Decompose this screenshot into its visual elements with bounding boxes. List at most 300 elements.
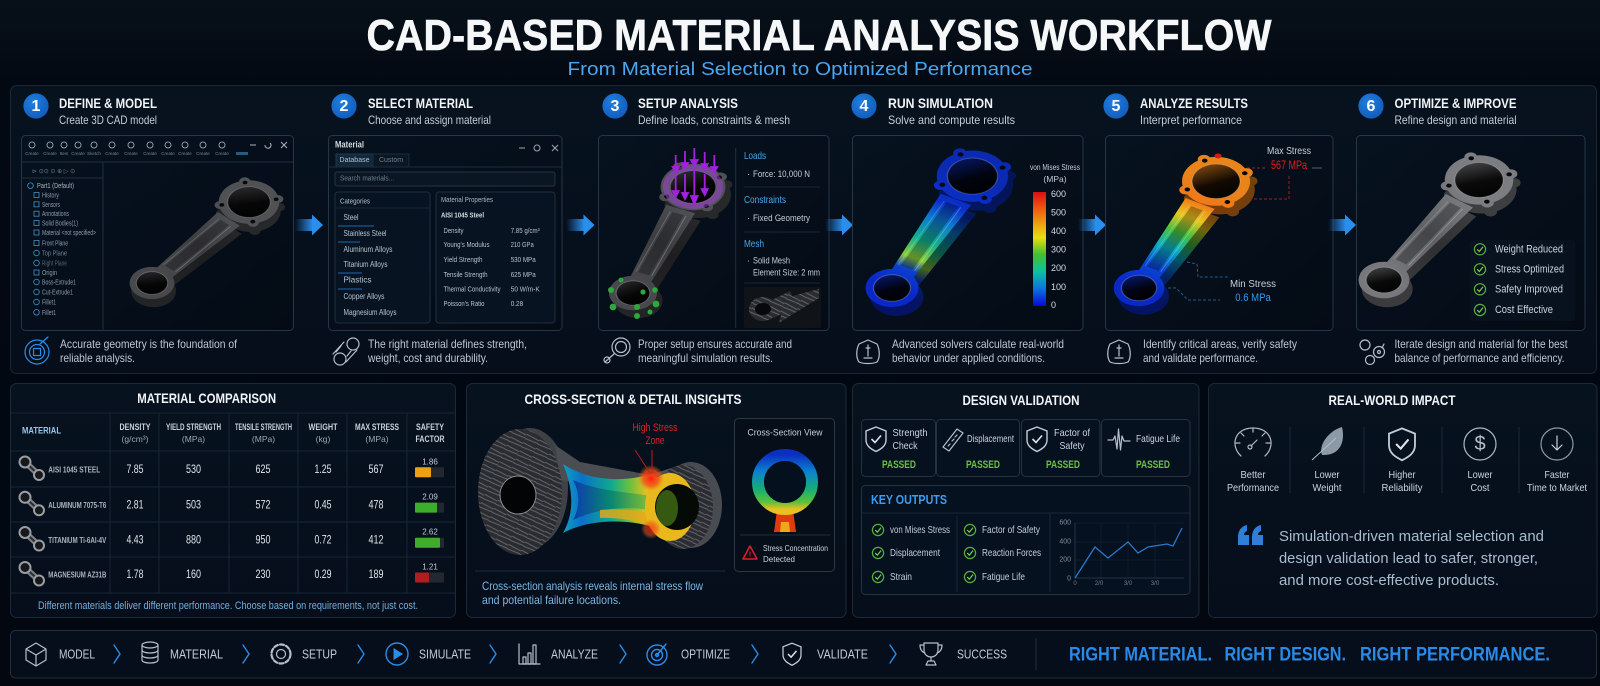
- CAD toolbar: Create: [196, 151, 210, 156]
- footer: setup: SETUP: [302, 646, 337, 662]
- step 1 caption icon: [25, 337, 49, 364]
- step 2 caption icon: [333, 338, 359, 365]
- table header: DENSITY: [120, 422, 150, 432]
- footer: validate: [783, 643, 868, 665]
- min stress callout: 0.6 MPa: [1235, 292, 1272, 304]
- impact: lower weight: Lower: [1314, 469, 1340, 481]
- step 6 number: [1358, 93, 1384, 119]
- categories list: Steel: [344, 213, 359, 222]
- categories list: Categories: [340, 196, 370, 206]
- step 2 material dialog: [328, 136, 562, 330]
- step 5 caption icon: [1108, 340, 1130, 364]
- cross-section caption: Cross-section analysis reveals internal stress flow: [482, 579, 703, 593]
- improvement checklist: Cost Effective: [1495, 304, 1553, 316]
- key outputs checklist: Displacement: [890, 547, 940, 559]
- row: AISI 1045 steel: 1.86: [422, 458, 438, 466]
- key outputs checklist: Fatigue Life: [982, 571, 1025, 583]
- rod with loads and constraints: [548, 148, 790, 324]
- footer: simulate: [386, 643, 471, 665]
- max stress callout: 567 MPa: [1271, 158, 1307, 172]
- material properties: [436, 192, 555, 323]
- impact: lower cost: [1464, 428, 1496, 494]
- step 3 setup panel: [548, 136, 829, 330]
- row: aluminum 7075-T6: 503: [186, 499, 201, 511]
- row: aluminum 7075-T6: 2.09: [422, 492, 438, 502]
- step 6 caption: balance of performance and efficiency.: [1394, 351, 1564, 365]
- cross-section rod cut-away: [478, 428, 722, 555]
- stress colour legend: 300: [1051, 245, 1066, 255]
- high stress zone callout: [632, 422, 678, 473]
- step 6 caption: [1394, 337, 1568, 365]
- step 2 number: [331, 93, 357, 119]
- row: magnesium AZ31B: 230: [256, 569, 270, 581]
- line chart: 200: [1059, 556, 1071, 564]
- step 3 number: 3: [611, 98, 620, 115]
- high stress zone callout: Zone: [646, 435, 664, 447]
- CAD feature tree: Cut-Extrude1: [42, 290, 73, 296]
- footer: analyze: [519, 644, 598, 664]
- stress-coloured rod: [810, 138, 1067, 322]
- stress colour legend: 0: [1051, 300, 1056, 310]
- footer: model: MODEL: [59, 646, 95, 662]
- dialog tabs: Database: [340, 157, 370, 164]
- slogan: RIGHT MATERIAL.: [1069, 644, 1212, 666]
- step 6 subheading: Refine design and material: [1394, 113, 1516, 127]
- CAD toolbar: Sketch: [87, 151, 101, 156]
- table title: MATERIAL COMPARISON: [137, 390, 276, 406]
- optimized rod: [1322, 145, 1555, 311]
- loads, constraints and mesh text: Fixed Geometry: [753, 213, 810, 224]
- CAD toolbar: [25, 142, 287, 175]
- step 1 CAD window: [21, 136, 302, 330]
- search box: [335, 172, 555, 186]
- step 5 caption: and validate performance.: [1143, 351, 1258, 365]
- slogan: RIGHT PERFORMANCE.: [1360, 644, 1550, 666]
- material properties: AISI 1045 Steel: [441, 210, 484, 220]
- step 6 optimized panel: [1322, 136, 1585, 330]
- loads, constraints and mesh text: ·: [747, 213, 750, 224]
- quote text: design validation lead to safer, stronger,: [1279, 550, 1538, 567]
- CAD toolbar: Create: [178, 151, 192, 156]
- arrow 5 to 6: [1328, 214, 1356, 236]
- step 2 caption: The right material defines strength,: [368, 337, 527, 351]
- stress colour legend: 600: [1051, 189, 1066, 199]
- row: titanium Ti-6Al-4V: 950: [256, 534, 270, 546]
- validation card: factor of safety: Factor of: [1054, 427, 1090, 439]
- CAD toolbar: Item: [60, 151, 69, 156]
- row: titanium Ti-6Al-4V: 412: [368, 534, 384, 546]
- categories list: [335, 192, 430, 323]
- material properties: 210 GPa: [511, 240, 534, 249]
- row: titanium Ti-6Al-4V: TITANIUM Ti-6Al-4V: [48, 536, 107, 545]
- CAD feature tree: Right Plane: [42, 260, 67, 268]
- validation card: factor of safety: [1022, 420, 1100, 476]
- min stress callout: Min Stress: [1230, 278, 1276, 290]
- CAD feature tree: [28, 183, 96, 317]
- validation card: strength check: PASSED: [882, 459, 916, 471]
- CAD feature tree: Top Plane: [42, 250, 67, 258]
- material properties: Thermal Conductivity: [444, 284, 501, 294]
- chevron: [243, 645, 249, 663]
- comparison table: [10, 413, 455, 593]
- material properties: 0.28: [511, 299, 523, 308]
- panel: workflow steps: [10, 86, 1596, 374]
- line chart: 0: [1073, 581, 1077, 587]
- stress colour legend: 200: [1051, 263, 1066, 273]
- row: aluminum 7075-T6: [20, 492, 444, 515]
- search box: Search materials...: [340, 176, 394, 182]
- key outputs box: [862, 486, 1190, 594]
- row: aluminum 7075-T6: 0.45: [314, 499, 332, 511]
- loads, constraints and mesh text: Force: 10,000 N: [753, 169, 810, 180]
- row: aluminum 7075-T6: 478: [368, 499, 384, 511]
- row: AISI 1045 steel: 1.25: [314, 464, 332, 476]
- slogan: RIGHT DESIGN.: [1224, 644, 1346, 666]
- design validation title: DESIGN VALIDATION: [962, 392, 1080, 408]
- quote text: and more cost-effective products.: [1279, 572, 1499, 589]
- step 3 heading: SETUP ANALYSIS: [638, 95, 738, 111]
- dialog tabs: Custom: [379, 157, 403, 164]
- table header: YIELD STRENGTH: [166, 422, 221, 432]
- footer: success: SUCCESS: [957, 646, 1007, 662]
- CAD feature tree: Sensors: [42, 202, 60, 209]
- footer: optimize: OPTIMIZE: [681, 646, 730, 662]
- step 5 caption: Identify critical areas, verify safety: [1143, 337, 1297, 351]
- key outputs checklist: von Mises Stress: [890, 524, 950, 536]
- impact: better performance: Performance: [1227, 482, 1279, 494]
- loads, constraints and mesh text: ·: [747, 169, 750, 180]
- cross-section title: CROSS-SECTION & DETAIL INSIGHTS: [524, 391, 742, 407]
- footer: validate: VALIDATE: [817, 646, 868, 662]
- step 5 number: 5: [1112, 98, 1121, 115]
- key outputs checklist: [872, 524, 1041, 583]
- validation card: strength check: Check: [892, 440, 918, 452]
- arrow 4 to 5: [1078, 214, 1106, 236]
- step 4 number: 4: [860, 98, 869, 115]
- row: magnesium AZ31B: 160: [186, 569, 201, 581]
- step 2 material dialog: Material: [335, 140, 364, 150]
- min stress callout: [1168, 262, 1276, 304]
- CAD feature tree: Origin: [42, 270, 57, 277]
- key outputs checklist: Strain: [890, 571, 912, 583]
- validation card: factor of safety: Safety: [1060, 440, 1085, 452]
- material properties: 50 W/m-K: [511, 284, 540, 294]
- step 4 subheading: Solve and compute results: [888, 113, 1015, 127]
- validation card: fatigue life: [1102, 420, 1190, 476]
- step 4: run simulation: [810, 93, 1083, 365]
- row: AISI 1045 steel: [20, 456, 444, 480]
- line chart: 0: [1067, 576, 1071, 582]
- row: AISI 1045 steel: 530: [186, 464, 201, 476]
- table header: TENSILE STRENGTH: [235, 422, 292, 432]
- CAD feature tree: Annotations: [42, 211, 69, 218]
- impact: faster time to market: Faster: [1544, 469, 1570, 481]
- footer: success: [920, 643, 1007, 665]
- loads, constraints and mesh text: Mesh: [744, 238, 764, 250]
- categories list: Plastics: [344, 276, 372, 284]
- step 1: define and model: [21, 93, 302, 365]
- impact title: REAL-WORLD IMPACT: [1328, 392, 1456, 408]
- step 2 caption: weight, cost and durability.: [367, 351, 488, 365]
- loads, constraints and mesh text: ·: [747, 256, 750, 266]
- row: titanium Ti-6Al-4V: 0.72: [314, 534, 332, 546]
- row: AISI 1045 steel: 567: [368, 464, 384, 476]
- impact: lower cost: Cost: [1470, 482, 1490, 494]
- connecting rod model: [111, 174, 302, 309]
- step 5 number: [1103, 93, 1129, 119]
- loads, constraints and mesh text: Constraints: [744, 194, 786, 206]
- step 5 heading: ANALYZE RESULTS: [1140, 95, 1248, 111]
- panel: real-world impact: [1208, 384, 1597, 618]
- footer: analyze: ANALYZE: [551, 646, 598, 662]
- step 5 results panel: [1061, 136, 1333, 330]
- CAD toolbar: Create: [105, 151, 119, 156]
- impact: lower cost: $: [1474, 433, 1486, 455]
- row: magnesium AZ31B: 189: [368, 569, 384, 581]
- line chart: 3/0: [1124, 581, 1133, 587]
- dialog tabs: [328, 154, 562, 167]
- row: AISI 1045 steel: 625: [256, 464, 270, 476]
- CAD toolbar: ⊳ ⊙⊙ ⊙ ⊕ ▷ ⊙: [32, 169, 75, 175]
- slogan: [1069, 644, 1550, 666]
- CAD toolbar: Create: [215, 151, 229, 156]
- categories list: Magnesium Alloys: [344, 308, 396, 317]
- step 2 subheading: Choose and assign material: [368, 113, 491, 127]
- step 6 number: 6: [1367, 98, 1376, 115]
- title: CAD-BASED MATERIAL ANALYSIS WORKFLOW: [366, 11, 1272, 60]
- categories list: Copper Alloys: [344, 292, 384, 301]
- loads, constraints and mesh text: [744, 150, 820, 283]
- improvement checklist: Stress Optimized: [1495, 263, 1564, 275]
- material properties: 625 MPa: [511, 270, 536, 279]
- improvement checklist: [1470, 240, 1575, 321]
- step 2 heading: SELECT MATERIAL: [368, 95, 473, 111]
- stress colour legend: 500: [1051, 208, 1066, 218]
- footer: setup: [272, 644, 337, 664]
- cross-section view inset: Cross-Section View: [748, 428, 823, 438]
- CAD toolbar: Create: [143, 151, 157, 156]
- step 1 subheading: Create 3D CAD model: [59, 113, 157, 127]
- stress warning: !: [749, 550, 751, 558]
- step 3 caption: Proper setup ensures accurate and: [638, 337, 792, 351]
- improvement checklist: Safety Improved: [1495, 283, 1563, 295]
- row: titanium Ti-6Al-4V: 880: [186, 534, 201, 546]
- material properties: Yield Strength: [444, 255, 482, 264]
- step 6 caption icon: [1360, 340, 1384, 364]
- step 1 caption: [60, 337, 238, 365]
- material properties: Tensile Strength: [444, 270, 488, 279]
- mesh thumbnail: [744, 287, 821, 328]
- CAD feature tree: Fillet1: [42, 310, 56, 317]
- arrow 1 to 2: [295, 214, 323, 236]
- panel: design validation: [852, 384, 1199, 618]
- chevron: [114, 645, 120, 663]
- table header: FACTOR: [416, 434, 445, 444]
- line chart: 600: [1059, 520, 1071, 526]
- impact: lower weight: Weight: [1312, 482, 1342, 494]
- key outputs box: KEY OUTPUTS: [871, 492, 947, 507]
- impact: higher reliability: [1382, 428, 1423, 494]
- impact: faster time to market: Time to Market: [1527, 482, 1587, 494]
- loads, constraints and mesh text: Element Size: 2 mm: [753, 268, 820, 278]
- row: magnesium AZ31B: 0.29: [314, 569, 332, 581]
- row: magnesium AZ31B: MAGNESIUM AZ31B: [48, 570, 106, 580]
- CAD feature tree: Fillet1: [42, 300, 56, 306]
- step 3 caption: [638, 337, 792, 365]
- row: magnesium AZ31B: [20, 562, 444, 586]
- step 4 heading: RUN SIMULATION: [888, 95, 993, 111]
- step 2 number: 2: [340, 98, 349, 115]
- key outputs checklist: Reaction Forces: [982, 547, 1041, 559]
- impact: better performance: [1227, 428, 1279, 494]
- validation card: displacement: [936, 420, 1020, 476]
- row: aluminum 7075-T6: ALUMINUM 7075-T6: [48, 501, 107, 510]
- material properties: Material Properties: [441, 197, 493, 204]
- validation card: displacement: PASSED: [966, 459, 1000, 471]
- stress colour legend: 100: [1051, 282, 1066, 292]
- validation card: factor of safety: PASSED: [1046, 459, 1080, 471]
- categories list: Stainless Steel: [344, 229, 387, 238]
- stress warning: Detected: [763, 554, 795, 564]
- improvement checklist: Weight Reduced: [1495, 243, 1563, 255]
- footer: simulate: SIMULATE: [419, 646, 471, 662]
- cross-section caption: and potential failure locations.: [482, 593, 621, 607]
- material properties: 7.85 g/cm³: [511, 226, 540, 235]
- impact: lower weight: [1312, 427, 1343, 494]
- CAD toolbar: Create: [124, 151, 138, 156]
- CAD toolbar: Create: [25, 151, 39, 156]
- categories list: Titanium Alloys: [344, 260, 388, 269]
- step 4 caption: Advanced solvers calculate real-world: [892, 337, 1064, 351]
- panel: material comparison: [10, 384, 456, 618]
- footer: material: MATERIAL: [170, 646, 223, 662]
- line chart: 2/0: [1095, 581, 1104, 587]
- step 3 number: [602, 93, 628, 119]
- high stress zone callout: High Stress: [632, 422, 678, 434]
- CAD toolbar: Create: [43, 151, 57, 156]
- step 4 caption icon: [857, 340, 879, 364]
- material properties: Density: [444, 226, 464, 235]
- CAD feature tree: Boss-Extrude1: [42, 280, 76, 286]
- step 3 caption: meaningful simulation results.: [638, 351, 773, 365]
- CAD feature tree: Material <not specified>: [42, 230, 96, 237]
- chevron: [358, 645, 364, 663]
- row: magnesium AZ31B: 1.78: [126, 569, 144, 581]
- material properties: 530 MPa: [511, 255, 536, 264]
- row: AISI 1045 steel: AISI 1045 STEEL: [48, 466, 100, 474]
- validation card: strength check: Strength: [892, 427, 928, 439]
- loads, constraints and mesh text: Solid Mesh: [753, 256, 790, 266]
- row: magnesium AZ31B: 1.21: [422, 562, 438, 572]
- chevron: [490, 645, 496, 663]
- footer: material: [142, 642, 223, 663]
- CAD feature tree: Part1 (Default): [37, 183, 74, 190]
- row: AISI 1045 steel: 7.85: [126, 464, 144, 476]
- step 1 number: 1: [32, 98, 41, 115]
- line chart: 400: [1059, 538, 1071, 546]
- step 4 number: [851, 93, 877, 119]
- table header: WEIGHT: [308, 422, 338, 432]
- table header: SAFETY: [416, 422, 444, 432]
- table header: (MPa): [252, 434, 275, 444]
- categories list: Aluminum Alloys: [344, 245, 392, 254]
- chevron: [752, 645, 758, 663]
- table header: (g/cm³): [122, 434, 149, 444]
- panel: cross-section and detail insights: [466, 384, 846, 618]
- loads, constraints and mesh text: Loads: [744, 150, 766, 162]
- subtitle: From Material Selection to Optimized Performance: [568, 58, 1032, 79]
- CAD toolbar: Create: [71, 151, 85, 156]
- chevron: [890, 645, 896, 663]
- line chart: [1059, 520, 1184, 587]
- row: titanium Ti-6Al-4V: [20, 527, 444, 550]
- table footnote: Different materials deliver different performance. Choose based on requirements, not just cost.: [38, 600, 418, 612]
- impact: lower cost: Lower: [1468, 469, 1493, 481]
- step 5: analyze results: [1061, 93, 1333, 365]
- validation card: fatigue life: Fatigue Life: [1136, 433, 1180, 445]
- step 3 caption icon: [604, 338, 630, 363]
- CAD toolbar: Create: [161, 151, 175, 156]
- quote text: Simulation-driven material selection and: [1279, 528, 1544, 545]
- table header: (MPa): [182, 434, 205, 444]
- row: aluminum 7075-T6: 572: [256, 499, 270, 511]
- validation card: fatigue life: PASSED: [1136, 459, 1170, 471]
- arrow 2 to 3: [566, 214, 594, 236]
- step 3 subheading: Define loads, constraints & mesh: [638, 113, 790, 127]
- step 1 caption: reliable analysis.: [60, 351, 135, 365]
- step 1 heading: DEFINE & MODEL: [59, 95, 157, 111]
- line chart: 3/0: [1151, 581, 1160, 587]
- chevron: [620, 645, 626, 663]
- table header: MATERIAL: [22, 426, 61, 436]
- stress colour legend: von Mises Stress: [1030, 163, 1080, 172]
- CAD feature tree: Solid Bodies(1): [42, 220, 78, 228]
- step 5 subheading: Interpret performance: [1140, 113, 1242, 127]
- step 2: select material: [328, 93, 562, 365]
- CAD feature tree: Front Plane: [42, 240, 68, 248]
- stress colour legend: (MPa): [1043, 174, 1067, 184]
- step 6 heading: OPTIMIZE & IMPROVE: [1394, 95, 1516, 111]
- step 6 caption: Iterate design and material for the best: [1394, 337, 1568, 351]
- step 5 caption: [1143, 337, 1297, 365]
- table header: [22, 422, 445, 444]
- stress colour legend: 400: [1051, 226, 1066, 236]
- arrow 3 to 4: [825, 214, 853, 236]
- step 4 caption: behavior under applied conditions.: [892, 351, 1045, 365]
- impact: higher reliability: Reliability: [1382, 482, 1423, 494]
- step 2 caption: [367, 337, 527, 365]
- step 1 caption: Accurate geometry is the foundation of: [60, 337, 238, 351]
- quote mark: [1238, 525, 1263, 545]
- table header: (MPa): [365, 434, 389, 444]
- material properties: Poisson's Ratio: [444, 299, 484, 308]
- impact: better performance: Better: [1240, 469, 1266, 481]
- cross-section view inset: [734, 418, 834, 572]
- footer: model: [26, 643, 95, 666]
- step 4 caption: [892, 337, 1064, 365]
- key outputs checklist: Factor of Safety: [982, 524, 1041, 536]
- row: titanium Ti-6Al-4V: 4.43: [126, 534, 144, 546]
- validation card: strength check: [862, 420, 936, 476]
- quote text: [1279, 528, 1544, 589]
- impact: higher reliability: Higher: [1388, 469, 1416, 481]
- table header: MAX STRESS: [355, 422, 399, 432]
- max stress callout: [1246, 145, 1322, 199]
- max stress callout: Max Stress: [1267, 145, 1311, 157]
- table header: (kg): [316, 434, 330, 444]
- stress warning: [743, 543, 828, 564]
- row: titanium Ti-6Al-4V: 2.62: [422, 528, 438, 536]
